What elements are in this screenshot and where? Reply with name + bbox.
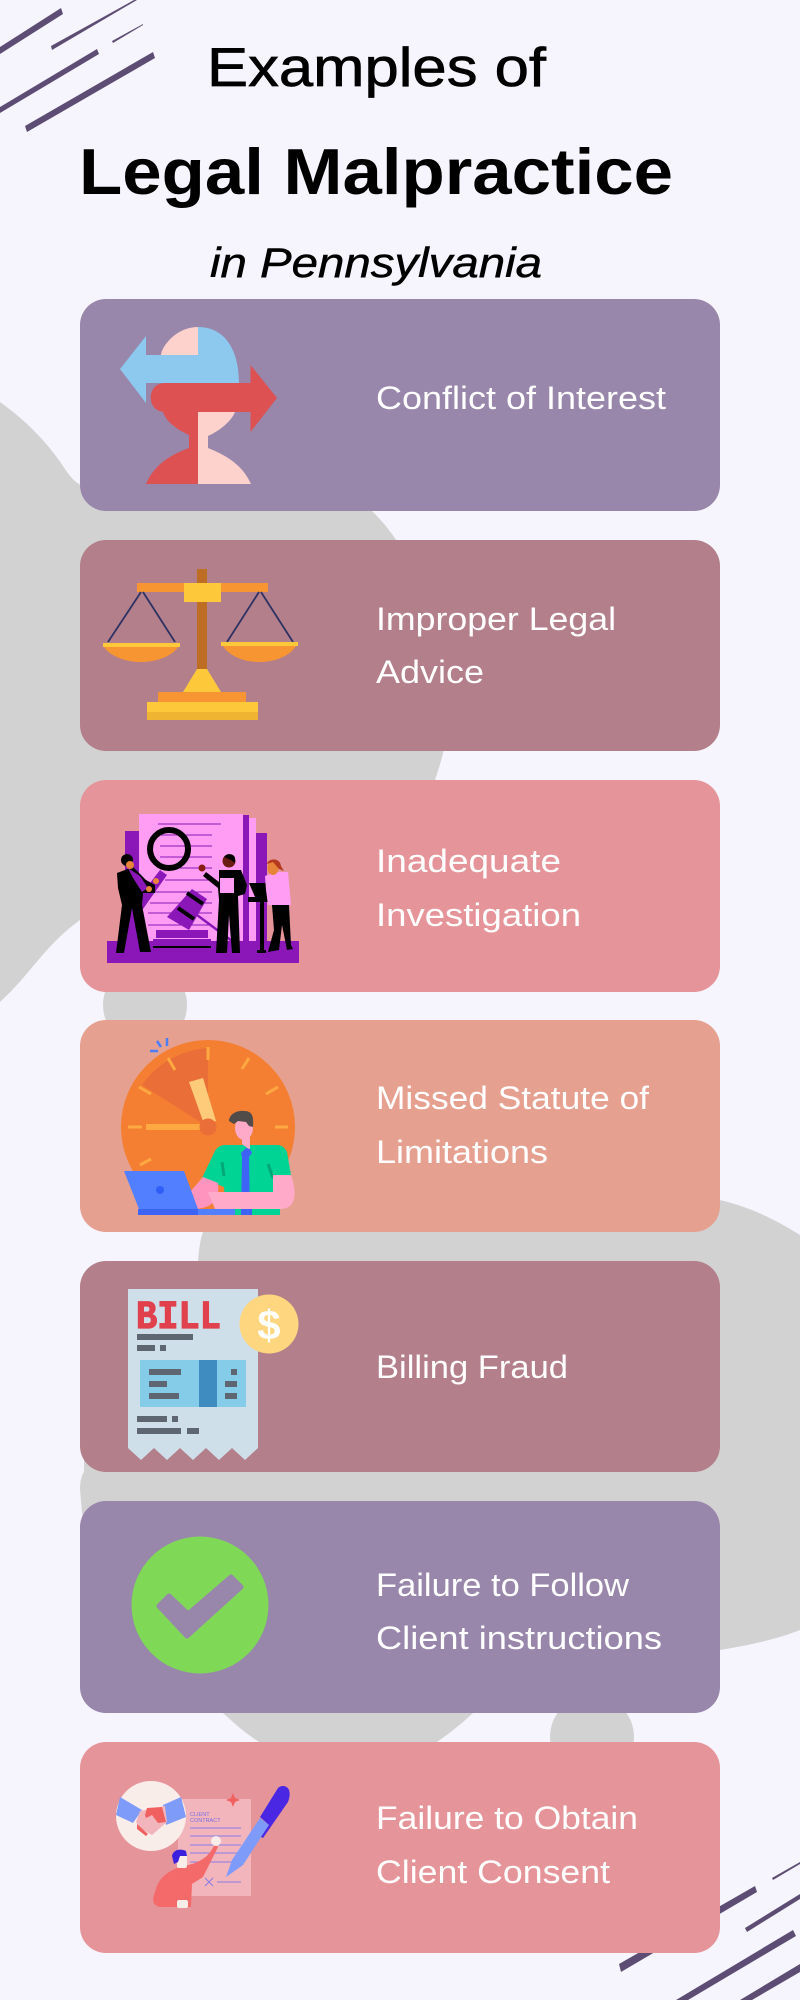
- label: Missed Statute of: [376, 1080, 649, 1116]
- panel: Inadequate Investigation: Investigation: [376, 897, 581, 933]
- label: Inadequate: [376, 843, 561, 879]
- label: Conflict of Interest: [376, 380, 666, 416]
- panel: Conflict of Interest: [80, 299, 720, 511]
- panel: Missed Statute of Limitations: [80, 1020, 720, 1232]
- panel: Failure to Obtain Client Consent: Client Consent: [376, 1854, 610, 1890]
- title: Examples of: Examples of: [207, 36, 547, 98]
- icon: scales of justice: [103, 569, 298, 720]
- decorative diagonal lines: bottom right: [619, 1862, 800, 2000]
- background circle: upper small: [103, 963, 187, 1047]
- background blob: upper left: [0, 402, 448, 1002]
- panel: Inadequate Investigation: [80, 780, 720, 992]
- label: Failure to Follow: [376, 1567, 630, 1603]
- panel: Improper Legal Advice: Advice: [376, 654, 484, 690]
- icon: contract signing and handshake: CONTRACT: [190, 1818, 221, 1824]
- decorative diagonal lines: top left: [0, 0, 155, 132]
- icon: contract signing and handshake: [116, 1781, 290, 1908]
- label: Billing Fraud: [376, 1349, 568, 1385]
- panel: Failure to Follow Client instructions: Client instructions: [376, 1620, 662, 1656]
- icon: bill receipt with dollar coin: BILL: [136, 1296, 221, 1341]
- icon: clock with businessman at laptop: [121, 1038, 295, 1215]
- icon: bill receipt with dollar coin: $: [256, 1304, 282, 1352]
- icon: green check mark: [132, 1536, 268, 1674]
- icon: head with opposing arrows: [120, 327, 277, 484]
- panel: Failure to Obtain Client Consent: [80, 1742, 720, 1953]
- background circle: lower small: [550, 1695, 634, 1779]
- title: in Pennsylvania: in Pennsylvania: [210, 239, 542, 286]
- panel: Missed Statute of Limitations: Limitations: [376, 1134, 548, 1170]
- label: Failure to Obtain: [376, 1800, 638, 1836]
- panel: Improper Legal Advice: [80, 540, 720, 751]
- panel: Billing Fraud: [80, 1261, 720, 1472]
- icon: contract signing and handshake: CLIENT: [190, 1812, 210, 1818]
- icon: legal investigators with documents: [107, 814, 299, 963]
- title: Legal Malpractice: Legal Malpractice: [79, 135, 673, 208]
- background blob: lower right: [80, 1197, 800, 1742]
- icon: bill receipt with dollar coin: [128, 1289, 298, 1460]
- panel: Failure to Follow Client instructions: [80, 1501, 720, 1713]
- label: Improper Legal: [376, 601, 616, 637]
